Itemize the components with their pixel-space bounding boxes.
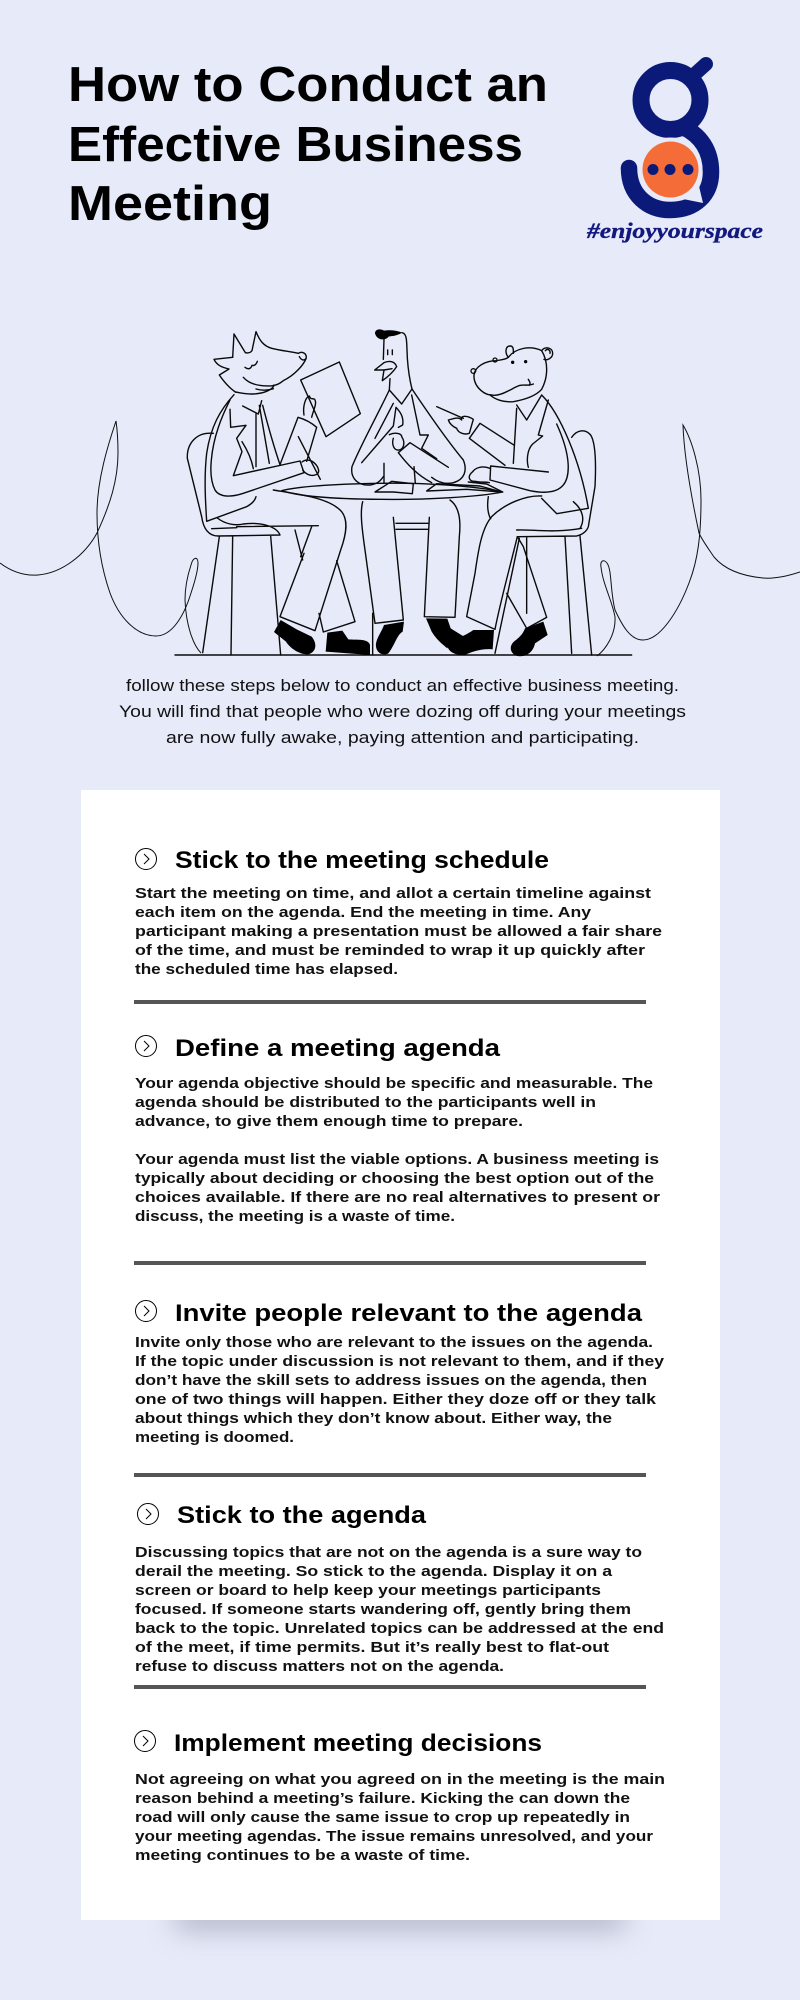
body 3: about things which they don’t know about. Either way, the [135, 1410, 612, 1427]
body 5: road will only cause the same issue to crop up repeatedly in [135, 1809, 630, 1826]
icon: chevron circle 5 [134, 1730, 156, 1752]
body 4: of the meet, if time permits. But it’s really best to flat-out [135, 1639, 609, 1656]
title: Meeting [68, 177, 272, 231]
body 3: If the topic under discussion is not relevant to them, and if they [135, 1353, 665, 1370]
section 3: Invite people relevant to the agenda [135, 1300, 665, 1446]
table [282, 481, 503, 499]
body 3: Invite only those who are relevant to the issues on the agenda. [135, 1334, 653, 1351]
body 2: Your agenda objective should be specific and measurable. The [135, 1075, 653, 1092]
body 4: derail the meeting. So stick to the agenda. Display it on a [135, 1563, 613, 1580]
body 5: reason behind a meeting’s failure. Kicking the can down the [135, 1790, 630, 1807]
ground line [175, 653, 632, 657]
heading 3: Invite people relevant to the agenda [175, 1300, 642, 1327]
title [68, 58, 548, 231]
illustration: three characters meeting at a table [175, 329, 632, 656]
intro text: are now fully awake, paying attention and participating. [166, 728, 639, 747]
title: Effective Business [68, 118, 523, 172]
intro text [119, 676, 686, 747]
character: wolf with paper and pen [205, 332, 370, 655]
section 4: Stick to the agenda [135, 1502, 664, 1675]
logo: g with speech bubble and hashtag [586, 64, 763, 243]
body 4: refuse to discuss matters not on the agenda. [135, 1658, 504, 1675]
heading 1: Stick to the meeting schedule [175, 847, 549, 874]
body 2: choices available. If there are no real alternatives to present or [135, 1189, 660, 1206]
decorative squiggle left [0, 421, 201, 653]
icon: chevron circle 3 [136, 1300, 156, 1322]
body 5: Not agreeing on what you agreed on in the meeting is the main [135, 1771, 665, 1788]
body 4: screen or board to help keep your meetings participants [135, 1582, 601, 1599]
body 1: each item on the agenda. End the meeting in time. Any [135, 904, 592, 921]
body 2: agenda should be distributed to the participants well in [135, 1094, 596, 1111]
heading 4: Stick to the agenda [177, 1502, 426, 1529]
body 1: Start the meeting on time, and allot a certain timeline against [135, 885, 651, 902]
section 1: Stick to the meeting schedule [135, 847, 662, 978]
intro text: follow these steps below to conduct an effective business meeting. [126, 676, 679, 695]
heading 5: Implement meeting decisions [174, 1730, 542, 1757]
body 3 [135, 1334, 665, 1446]
body 4: focused. If someone starts wandering off, gently bring them [135, 1601, 631, 1618]
decorative squiggle right [597, 425, 800, 656]
body 1: the scheduled time has elapsed. [135, 961, 398, 978]
title: How to Conduct an [68, 58, 548, 112]
logo: g with speech bubble and hashtag: #enjoyyourspace [586, 218, 763, 243]
white content panel [81, 790, 720, 1920]
chair: right [495, 431, 596, 655]
body 5: meeting continues to be a waste of time. [135, 1847, 470, 1864]
body 2: typically about deciding or choosing the best option out of the [135, 1170, 654, 1187]
section 2: Define a meeting agenda [135, 1035, 660, 1225]
heading 2: Define a meeting agenda [175, 1035, 500, 1062]
body 2: advance, to give them enough time to prepare. [135, 1113, 523, 1130]
intro text: You will find that people who were dozing off during your meetings [119, 702, 686, 721]
section 5: Implement meeting decisions [134, 1730, 665, 1864]
body 2 [135, 1075, 660, 1225]
body 3: one of two things will happen. Either they doze off or they talk [135, 1391, 657, 1408]
body 4: Discussing topics that are not on the agenda is a sure way to [135, 1544, 642, 1561]
body 5 [135, 1771, 665, 1864]
body 3: meeting is doomed. [135, 1429, 294, 1446]
body 4: back to the topic. Unrelated topics can be addressed at the end [135, 1620, 664, 1637]
body 2: Your agenda must list the viable options. A business meeting is [135, 1151, 659, 1168]
character: bird man [352, 329, 465, 655]
icon: chevron circle 1 [136, 848, 156, 870]
body 3: don’t have the skill sets to address issues on the agenda, then [135, 1372, 647, 1389]
icon: chevron circle 2 [136, 1036, 156, 1056]
icon: chevron circle 4 [138, 1504, 158, 1524]
body 1 [135, 885, 662, 978]
body 5: your meeting agendas. The issue remains unresolved, and your [135, 1828, 653, 1845]
card shadow [175, 1905, 625, 1929]
chair: left [187, 433, 318, 655]
body 1: participant making a presentation must be allowed a fair share [135, 923, 662, 940]
body 4 [135, 1544, 664, 1675]
body 2: discuss, the meeting is a waste of time. [135, 1208, 455, 1225]
character: hippo pointing [437, 346, 588, 656]
body 1: of the time, and must be reminded to wrap it up quickly after [135, 942, 645, 959]
